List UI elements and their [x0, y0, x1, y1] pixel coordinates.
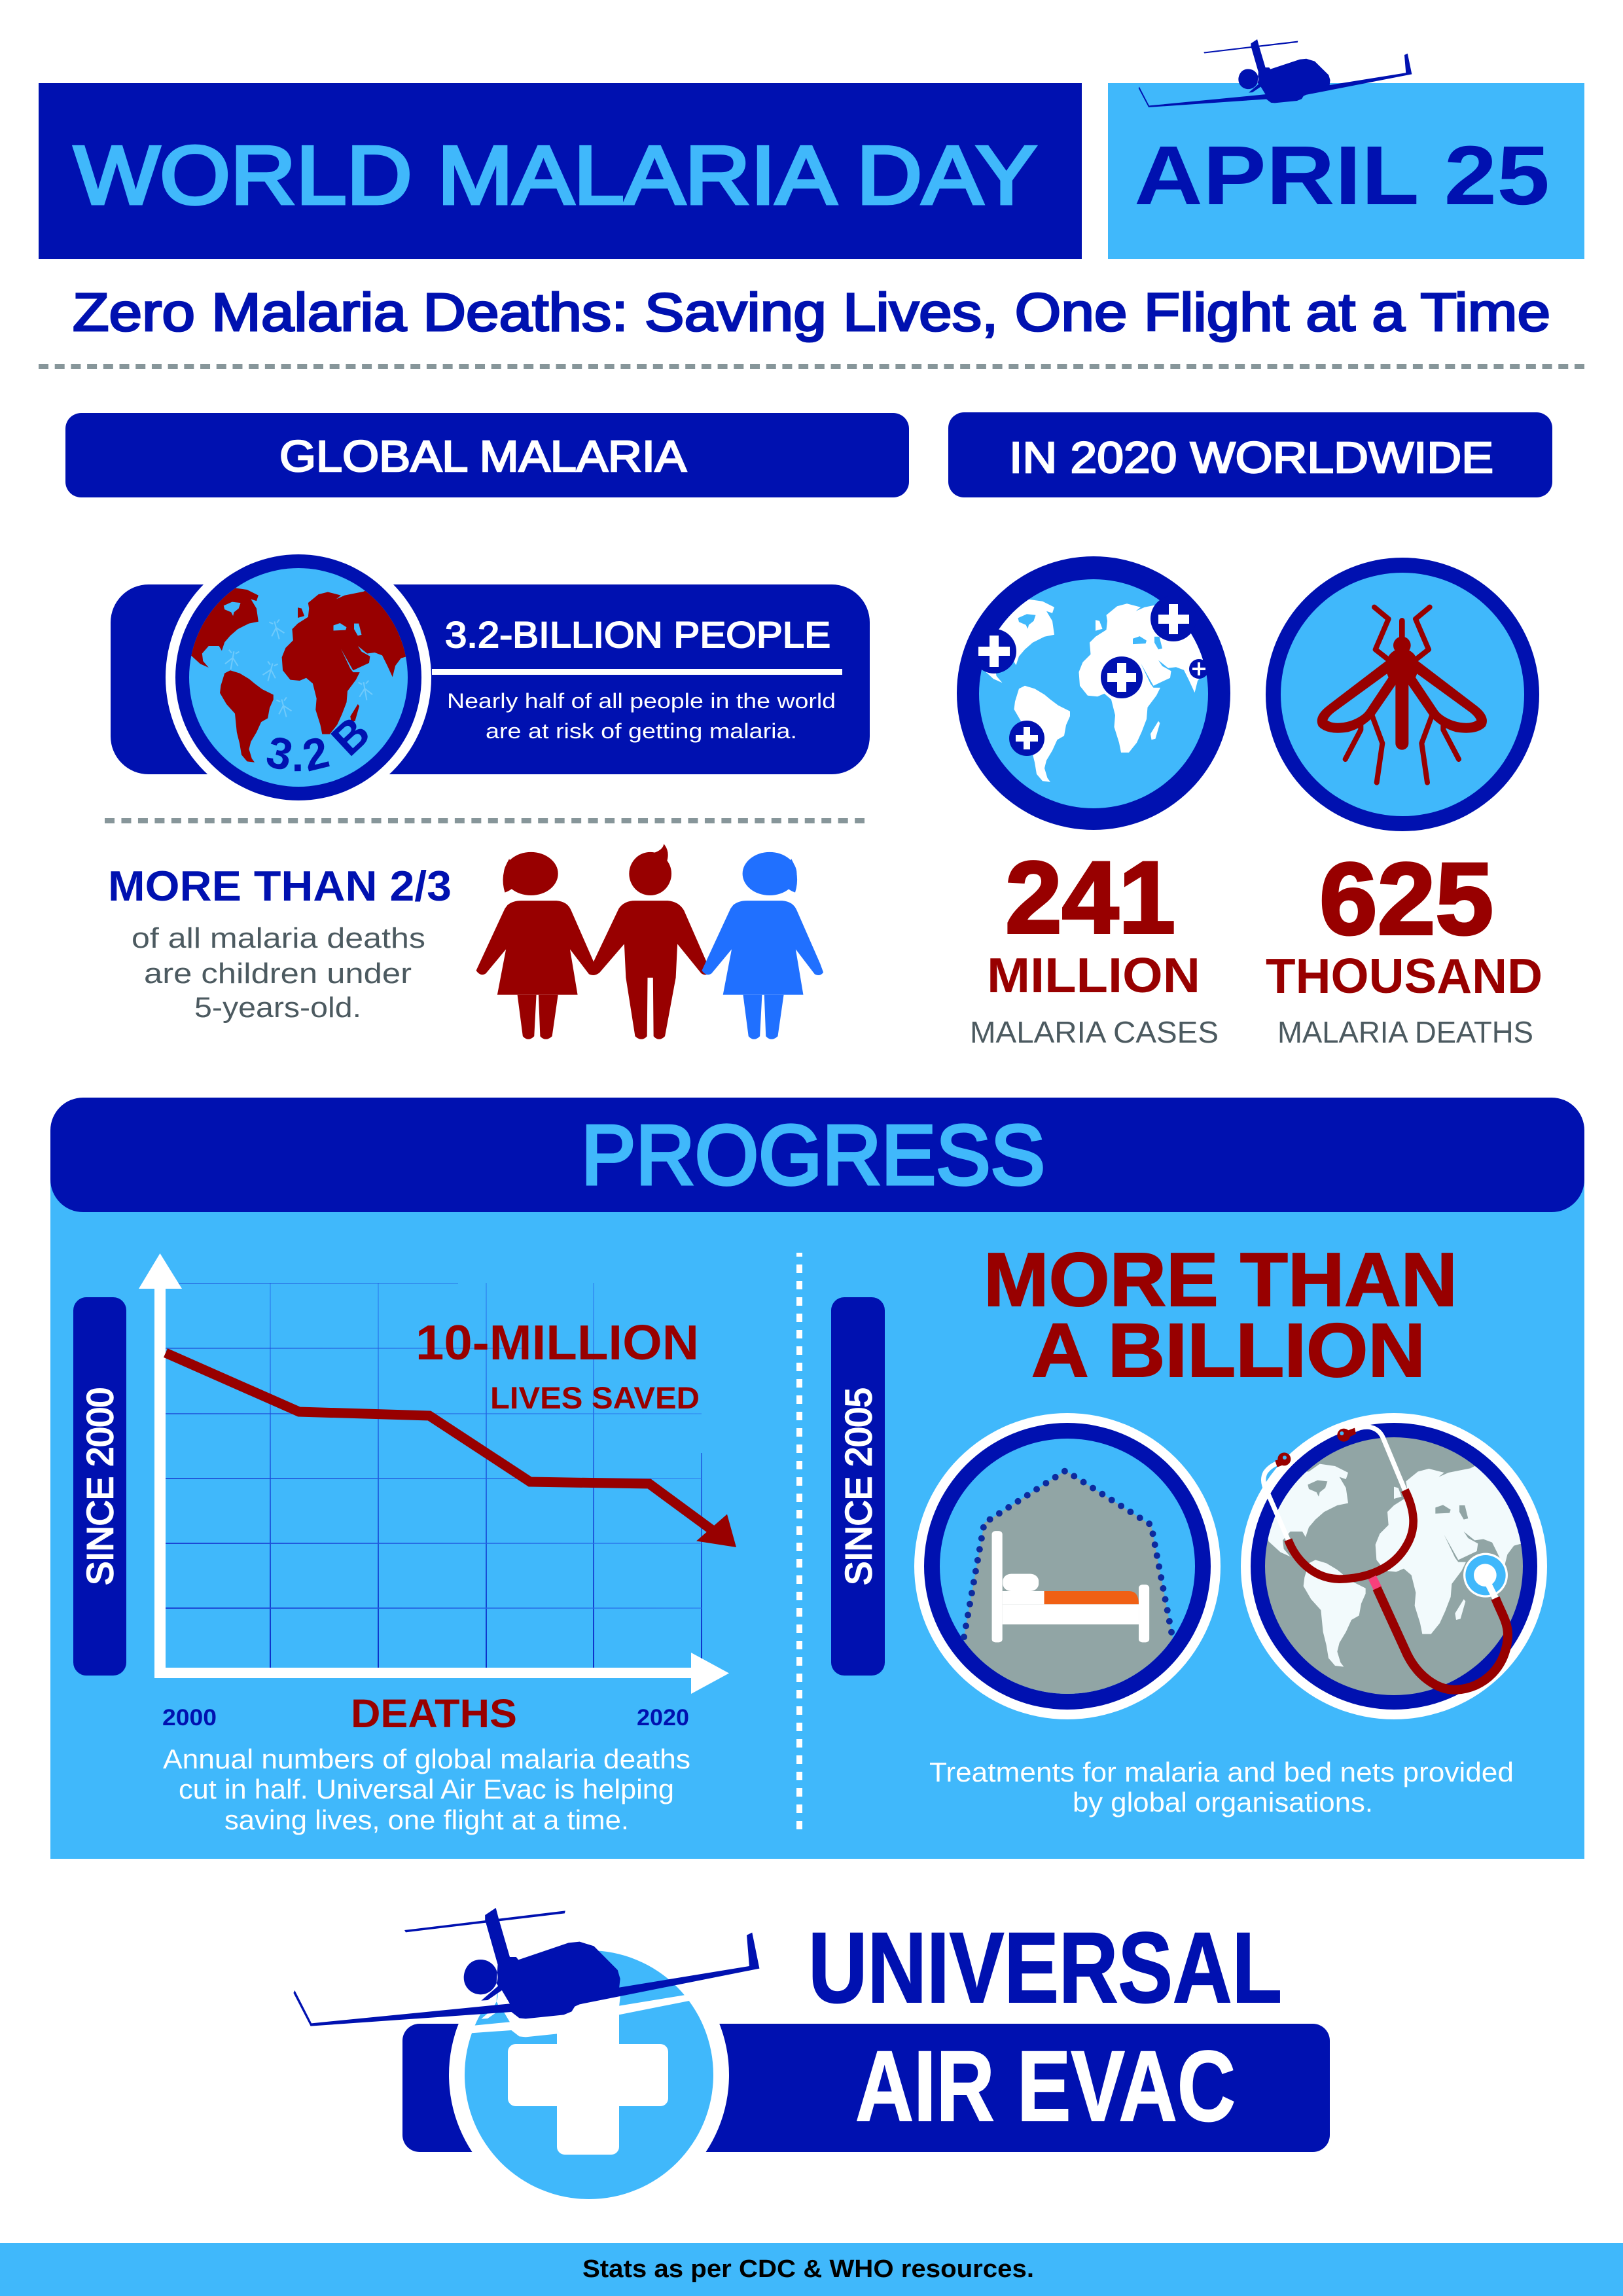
- trend arrow: [166, 1353, 736, 1547]
- stat: more than 2/3: MORE THAN 2/3: [108, 862, 452, 910]
- stat description: are children under: [144, 958, 412, 990]
- heading: more than a billion: MORE THAN: [984, 1237, 1457, 1322]
- chart description: cut in half. Universal Air Evac is helping: [179, 1774, 674, 1804]
- description: treatments and bed nets: by global organisations.: [1073, 1787, 1373, 1818]
- big number: 625: [1319, 842, 1493, 956]
- icon: red globe badge: 3.2 B: [267, 720, 368, 771]
- logo plane: [293, 1908, 759, 2045]
- logo: Universal Air Evac: [293, 1908, 1330, 2215]
- axes: [139, 1253, 729, 1694]
- stat description: of all malaria deaths: [132, 922, 425, 954]
- date banner: April 25: [1108, 83, 1584, 259]
- chart callout subline: LIVES SAVED: [490, 1380, 700, 1415]
- icon: mosquito: [1266, 558, 1539, 831]
- description: treatments and bed nets: Treatments for malaria and bed nets provided: [929, 1757, 1514, 1787]
- stat description: are at risk of getting malaria.: [486, 719, 797, 743]
- icon: bed under net: [914, 1413, 1221, 1728]
- label: since 2005: [831, 1297, 885, 1676]
- icon: header plane: [1139, 39, 1412, 107]
- panel: progress: [50, 1098, 1584, 1859]
- stat description: 5-years-old.: [194, 992, 361, 1024]
- stat description: [447, 689, 836, 743]
- stat heading: 3.2-BILLION PEOPLE: [445, 614, 830, 655]
- x axis end label: 2020: [637, 1705, 689, 1731]
- unit: THOUSAND: [1266, 948, 1543, 1003]
- line chart: deaths since 2000: [139, 1253, 736, 1736]
- label: since 2000: SINCE 2000: [79, 1388, 120, 1585]
- stat description: [132, 922, 425, 1024]
- subtitle: Zero Malaria Deaths: Saving Lives, One Flight at a Time: [73, 283, 1550, 342]
- heading: PROGRESS: [581, 1108, 1045, 1202]
- logo medical badge: [449, 1935, 729, 2215]
- label: since 2005: SINCE 2005: [838, 1388, 879, 1585]
- section heading: in 2020 worldwide: IN 2020 WORLDWIDE: [1009, 433, 1493, 482]
- logo wordmark bottom: AIR EVAC: [855, 2030, 1236, 2142]
- footer bar: [0, 2243, 1623, 2296]
- stat: more than 2/3: [108, 862, 452, 1024]
- date text: APRIL 25: [1134, 129, 1550, 223]
- icon: globe with stethoscope: [1241, 1413, 1547, 1719]
- title: WORLD MALARIA DAY: [74, 129, 1037, 221]
- x axis title: DEATHS: [351, 1691, 517, 1736]
- chart description: saving lives, one flight at a time.: [224, 1804, 629, 1835]
- big number: 241: [1005, 841, 1175, 955]
- logo wordmark top: UNIVERSAL: [808, 1912, 1282, 2024]
- source note: Stats as per CDC & WHO resources.: [582, 2255, 1034, 2283]
- chart callout: 10-MILLION: [416, 1315, 699, 1370]
- heading: more than a billion: A BILLION: [1031, 1308, 1425, 1393]
- label: since 2000: [73, 1297, 126, 1676]
- stat: 241 million malaria cases: [957, 556, 1230, 1049]
- caption: MALARIA CASES: [970, 1015, 1219, 1049]
- panel: 3.2 billion people: [111, 554, 870, 800]
- section heading: global malaria: GLOBAL MALARIA: [279, 432, 687, 481]
- caption: MALARIA DEATHS: [1277, 1015, 1533, 1049]
- icon: three children holding hands: [476, 844, 823, 1039]
- section heading: in 2020 worldwide: [948, 412, 1552, 497]
- icon: world map with crosses: [957, 556, 1230, 830]
- description: treatments and bed nets: [929, 1757, 1514, 1818]
- unit: MILLION: [987, 948, 1200, 1003]
- section heading: global malaria: [65, 413, 909, 497]
- header banner: World Malaria Day: [39, 83, 1082, 259]
- icon: red globe badge: [166, 554, 431, 800]
- stat: 625 thousand malaria deaths: [1266, 558, 1543, 1049]
- chart description: Annual numbers of global malaria deaths: [163, 1744, 690, 1774]
- chart description: [163, 1744, 690, 1835]
- stat description: Nearly half of all people in the world: [447, 689, 836, 713]
- x axis start label: 2000: [162, 1705, 217, 1731]
- heading: more than a billion: [984, 1237, 1457, 1393]
